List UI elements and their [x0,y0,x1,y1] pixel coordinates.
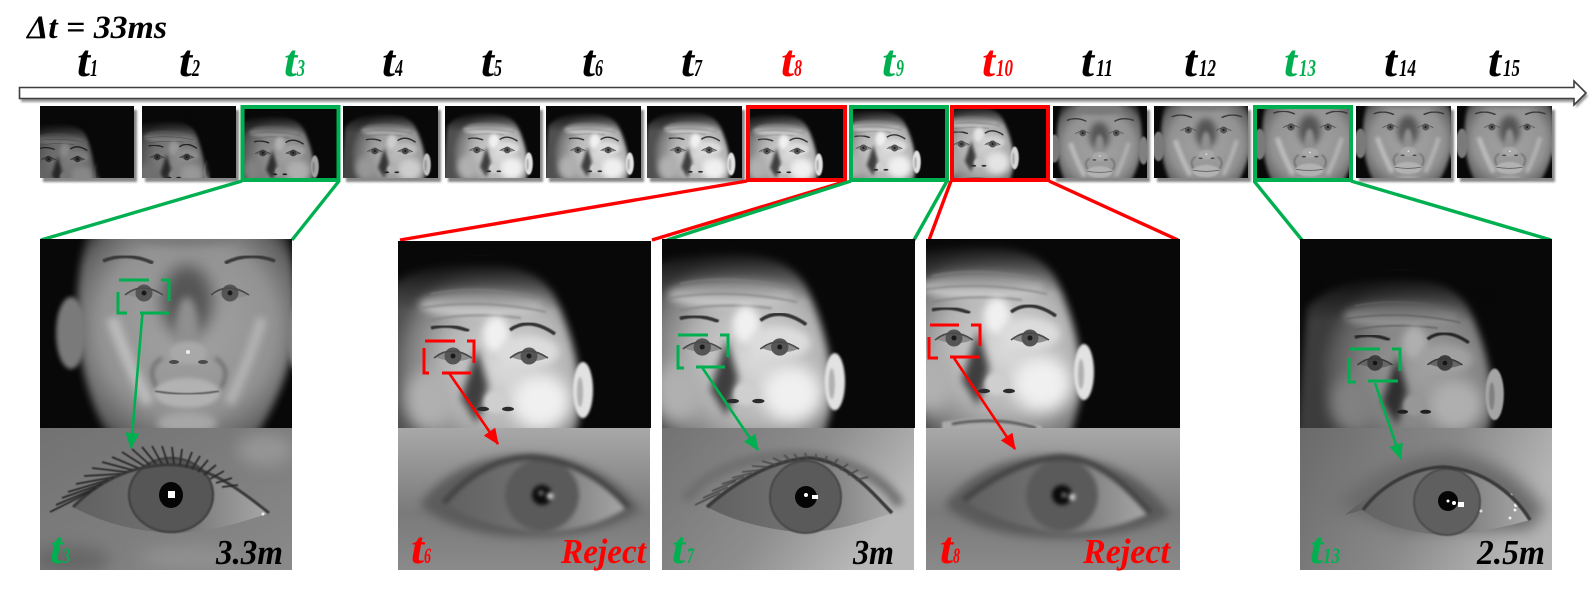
arrow: t8 eye zoom [954,358,1015,449]
thumbnail t5 [445,106,540,178]
eye image t7 [662,428,914,570]
connector t9 [667,181,947,240]
frame label t13: 13 [1323,543,1340,568]
label t15: t [1488,35,1502,86]
thumbnail shadows [43,110,1555,182]
arrow: t7 eye zoom [702,368,758,450]
label t15: 15 [1503,56,1520,82]
label t10 [982,35,1013,86]
face image t8 [926,239,1180,428]
time step label: Δt = 33ms [25,10,167,46]
label t7: 7 [694,56,703,82]
frame label t6: 6 [424,543,431,568]
label t2: t [179,35,193,86]
thumbnail t4 [343,106,438,178]
frame label t6 [411,522,431,573]
label t4: 4 [394,56,403,82]
thumbnail t14 [1356,106,1451,178]
frame label t7: t [672,522,686,573]
frame label t13: t [1310,522,1324,573]
thumbnail t1 [40,106,134,178]
eye image t3 [40,428,292,570]
panel: t7 accepted capture [608,239,915,573]
label t6: t [582,35,596,86]
frame label t13 [1310,522,1340,573]
highlight frame t10 [952,107,1048,180]
eye image t13 [1300,428,1552,570]
thumbnail t10 [954,109,1046,178]
label t5 [481,35,502,86]
face image t6 [398,241,651,428]
label t9 [882,35,904,86]
thumbnail t15 [1457,106,1552,178]
eye box t13 [1349,349,1400,382]
eye box t3 [118,280,169,313]
distance label t13: 2.5m [1476,533,1545,572]
eye image t8 [926,428,1180,570]
label t9: 9 [896,56,904,82]
label t6 [582,35,603,86]
highlight frame t9 [851,107,947,180]
label t1 [77,35,98,86]
label t12: t [1184,35,1198,86]
face image t7 [662,239,915,428]
frame label t6: t [411,522,425,573]
frame label t3: 3 [62,543,70,568]
label t13: 13 [1299,56,1316,82]
panel: t13 accepted capture [1290,239,1552,573]
frame label t8: t [940,522,954,573]
thumbnail t6 [546,106,641,178]
label t14: 14 [1399,56,1416,82]
arrow: t13 eye zoom [1375,383,1401,459]
thumbnail t11 [1053,106,1147,178]
frame label t8: 8 [953,543,960,568]
connector t13 [1254,181,1551,240]
frame label t7: 7 [687,543,695,568]
thumbnail t8 [750,109,843,178]
eye box t8 [929,325,980,358]
frame label t8 [940,522,960,573]
panel: t8 rejected capture [862,238,1180,573]
label t10: t [982,35,996,86]
connector t8 [400,181,847,240]
label t14 [1384,35,1416,86]
thumbnail t13 [1257,109,1349,178]
thumbnail t9 [853,109,945,178]
arrow: t6 eye zoom [449,373,498,444]
label t3 [284,35,305,86]
distance label t7: 3m [852,533,894,572]
label t6: 6 [595,56,603,82]
label t9: t [882,35,896,86]
distance label: 3.3m [215,533,283,572]
label t11 [1081,35,1113,86]
label t4: t [382,35,396,86]
label t10: 10 [996,56,1013,82]
highlight frame t3 [242,107,338,180]
connector t10 [929,181,1178,240]
arrow: t3 eye zoom [131,313,142,448]
eye box t7 [678,335,728,368]
thumbnail t12 [1154,106,1248,178]
reject label t6: Reject [560,532,647,571]
label t12: 12 [1199,56,1216,82]
label t5: 5 [494,56,502,82]
label t3: t [284,35,298,86]
arrow: timeline [20,81,1588,108]
label t1: 1 [90,56,98,82]
face image t3 [40,239,292,428]
frame labels t1 to t15 [77,35,1520,86]
label t2 [179,35,200,86]
panel: t6 rejected capture [361,241,651,573]
face image t13 [1300,239,1552,428]
label t8 [781,35,802,86]
label t11: 11 [1096,56,1113,82]
label t7: t [681,35,695,86]
zoom connector lines [41,181,1551,240]
label t1: t [77,35,91,86]
label t8: t [781,35,795,86]
highlight frame t13 [1255,107,1351,180]
label t4 [382,35,403,86]
label t14: t [1384,35,1398,86]
label t12 [1184,35,1216,86]
label t13: t [1284,35,1298,86]
reject label t8: Reject [1082,532,1171,571]
panel: t3 accepted capture [30,199,313,574]
thumbnail strip [14,87,1561,197]
thumbnail t7 [647,106,742,178]
eye image t6 [398,428,650,570]
eye box t6 [424,341,474,373]
frame label t7 [672,522,695,573]
frame label t3 [50,522,70,573]
thumbnail t3 [244,109,336,178]
label t15 [1488,35,1520,86]
label t2: 2 [191,56,200,82]
label t8: 8 [794,56,802,82]
label t5: t [481,35,495,86]
highlight frame t8 [748,107,845,180]
label t7 [681,35,703,86]
connector t3 [41,181,339,240]
label t3: 3 [296,56,305,82]
thumbnail t2 [142,106,236,178]
frame label t3: t [50,522,64,573]
label t11: t [1081,35,1095,86]
label t13 [1284,35,1316,86]
